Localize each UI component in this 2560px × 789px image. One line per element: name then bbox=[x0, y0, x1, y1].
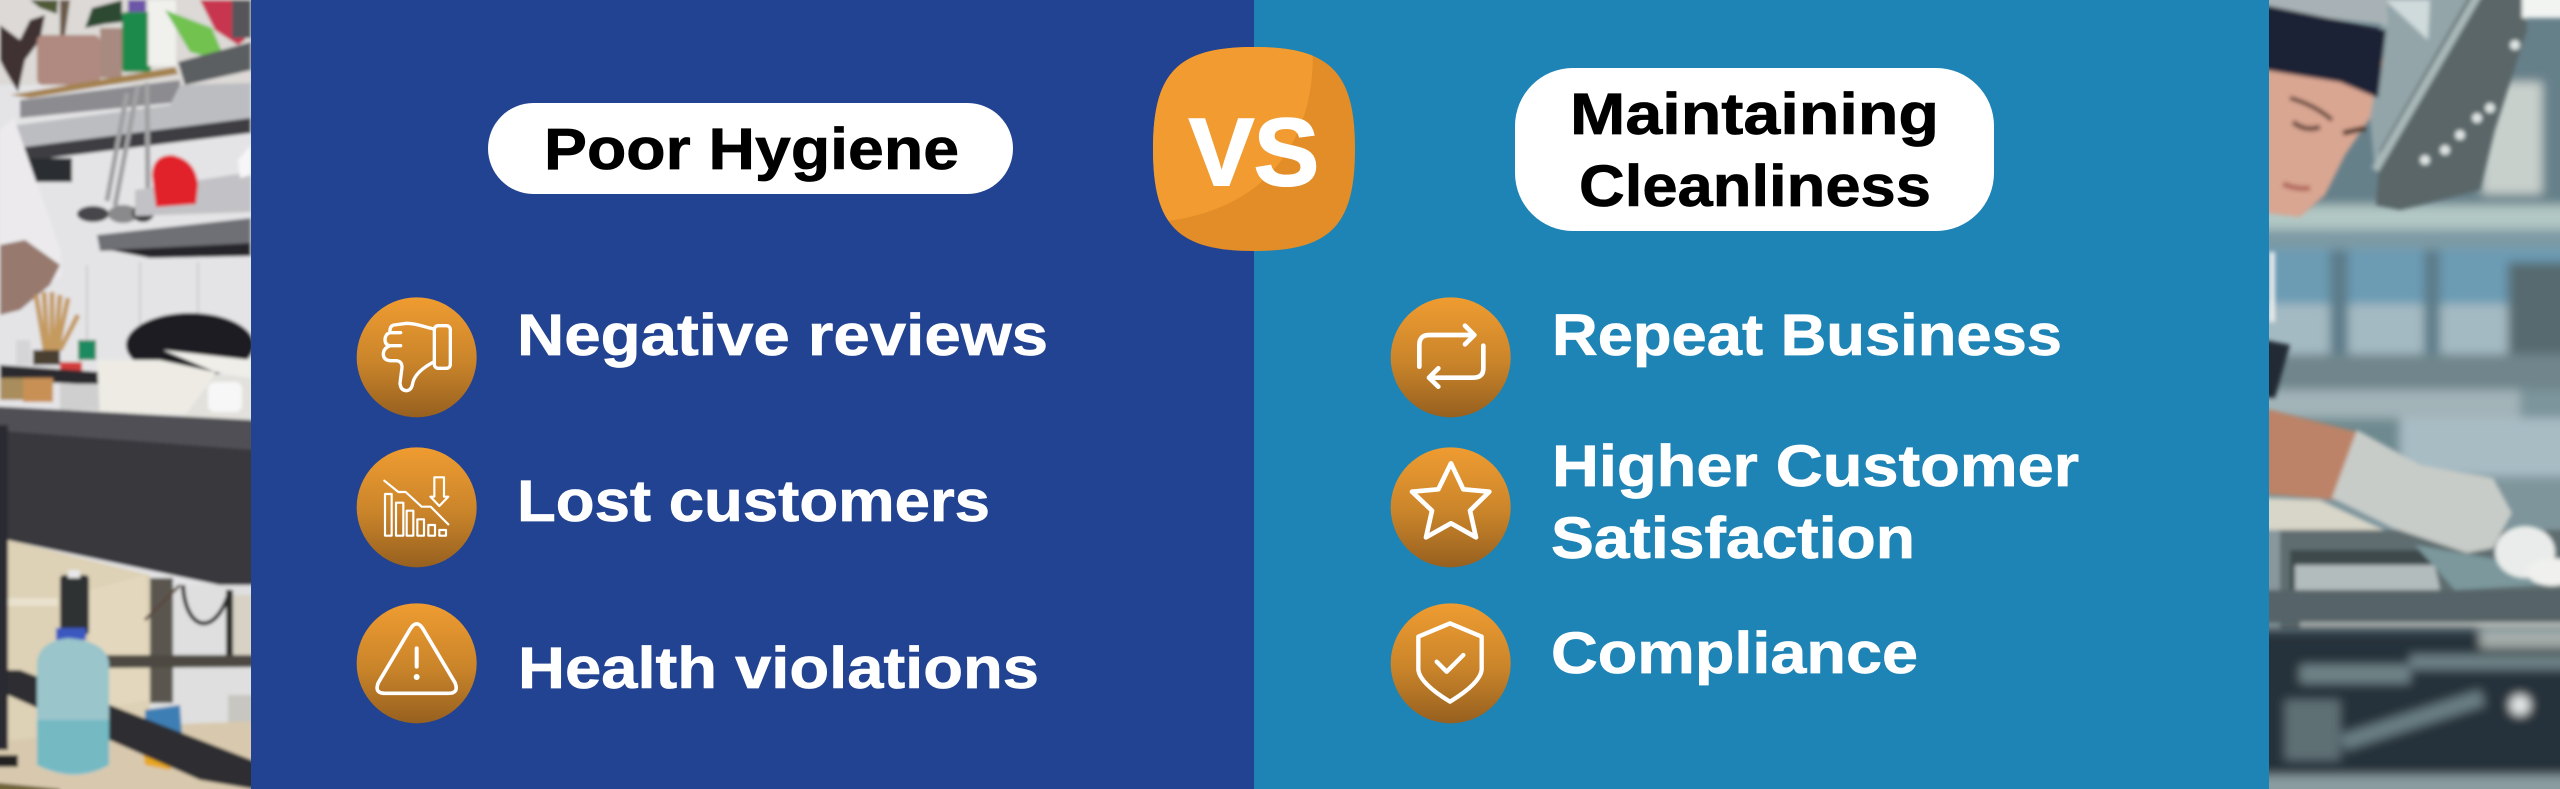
icon: declining bar chart bbox=[357, 447, 477, 567]
VS badge: VS bbox=[1189, 99, 1319, 206]
heading pill: Maintaining Cleanliness: Maintaining bbox=[1570, 82, 1939, 147]
text: Higher Customer Satisfaction: Higher Customer bbox=[1552, 434, 2079, 499]
heading pill: Maintaining Cleanliness: Cleanliness bbox=[1579, 154, 1931, 219]
panel: maintaining cleanliness bbox=[1254, 0, 2269, 789]
photo: chef cleaning stainless steel kitchen bbox=[2240, 0, 2560, 789]
icon: shield with check bbox=[1391, 603, 1511, 723]
icon: star bbox=[1391, 447, 1511, 567]
text: Health violations: Health violations bbox=[518, 636, 1039, 701]
heading pill: Poor Hygiene: Poor Hygiene bbox=[544, 117, 959, 182]
text: Negative reviews: Negative reviews bbox=[517, 303, 1048, 368]
text: Higher Customer Satisfaction: Satisfaction bbox=[1551, 506, 1915, 571]
panel: poor hygiene bbox=[251, 0, 1254, 789]
icon: warning triangle bbox=[357, 603, 477, 723]
VS badge bbox=[1153, 47, 1355, 251]
heading pill: Poor Hygiene bbox=[488, 103, 1013, 194]
text: Higher Customer Satisfaction bbox=[1551, 434, 2079, 571]
photo: cluttered dirty kitchen bbox=[0, 0, 251, 789]
heading pill: Maintaining Cleanliness bbox=[1515, 68, 1994, 231]
icon: thumbs down bbox=[357, 297, 477, 417]
icon: repeat arrows bbox=[1391, 297, 1511, 417]
text: Lost customers: Lost customers bbox=[517, 469, 990, 534]
text: Repeat Business: Repeat Business bbox=[1552, 303, 2062, 368]
text: Compliance: Compliance bbox=[1551, 621, 1918, 686]
